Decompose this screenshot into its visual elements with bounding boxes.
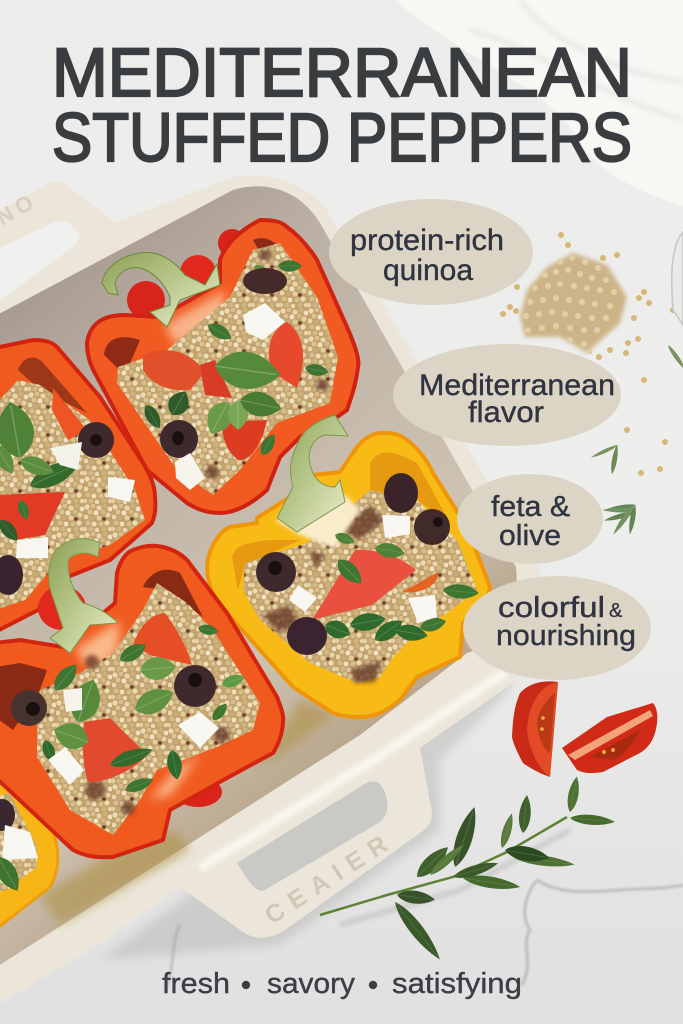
label: colorful and nourishing: colorful xyxy=(498,592,605,624)
dish cavity xyxy=(0,186,517,968)
basil leaves xyxy=(212,348,283,394)
label: protein-rich quinoa xyxy=(329,199,533,305)
red pepper left xyxy=(0,340,155,632)
top handle opening xyxy=(0,221,80,304)
tomato wedge xyxy=(312,550,416,620)
stem xyxy=(49,539,118,653)
quinoa filling xyxy=(37,583,260,835)
feta cubes xyxy=(178,712,219,748)
tomato wedge left xyxy=(512,681,558,777)
rim highlight xyxy=(200,672,505,868)
quinoa filling xyxy=(0,380,145,610)
bottom handle opening xyxy=(237,781,387,891)
basil and herbs xyxy=(65,675,107,727)
flesh highlight xyxy=(165,290,225,345)
tagline: savory xyxy=(267,968,356,1000)
olives xyxy=(256,552,296,592)
small herb twigs xyxy=(590,344,683,536)
inner pockets xyxy=(104,238,315,375)
label: colorful and nourishing: & xyxy=(609,600,623,622)
olives xyxy=(78,422,114,458)
title: MEDITERRANEAN xyxy=(52,34,632,111)
fresh herbs xyxy=(0,516,22,545)
herbs xyxy=(332,554,367,589)
quinoa pile xyxy=(500,232,683,536)
feta cubes xyxy=(243,303,285,340)
cranberry bits xyxy=(262,505,385,683)
feta cubes xyxy=(382,515,410,538)
label: colorful and nourishing xyxy=(463,576,651,680)
quinoa grains xyxy=(523,255,617,354)
tagline: fresh xyxy=(162,968,230,1000)
pepper body xyxy=(0,546,283,857)
label: feta and olive: olive xyxy=(499,520,561,552)
pale flesh at stem base xyxy=(275,495,360,548)
stem xyxy=(277,415,348,532)
scattered grains xyxy=(500,232,676,476)
pepper body xyxy=(87,220,358,513)
tomato pieces xyxy=(143,350,205,390)
baking dish xyxy=(0,175,543,1006)
dish handle top left xyxy=(0,182,118,312)
red pepper top center xyxy=(87,220,358,513)
yellow pepper center xyxy=(207,415,490,717)
flesh highlight xyxy=(75,620,200,800)
olives xyxy=(174,665,216,707)
sprig shadow xyxy=(340,830,570,925)
dish rim xyxy=(0,175,543,1006)
dish shadow xyxy=(100,240,535,960)
tomato pieces xyxy=(52,388,87,440)
label: feta and olive xyxy=(457,474,603,564)
inner pockets xyxy=(0,570,203,730)
fresh herbs xyxy=(163,387,194,420)
herb sprig xyxy=(320,776,615,963)
back lobes xyxy=(127,281,165,319)
dark cranberry bits xyxy=(205,249,328,479)
tomato pieces xyxy=(133,613,192,665)
label: feta and olive: feta & xyxy=(491,491,570,523)
title xyxy=(52,34,632,176)
back lobes xyxy=(38,586,86,630)
herb xyxy=(0,852,26,895)
cherry tomato wedges xyxy=(512,681,657,777)
feta xyxy=(2,825,38,860)
white linen towel xyxy=(395,0,683,206)
olives xyxy=(243,268,287,294)
label: Mediterranean flavor: Mediterranean xyxy=(419,369,615,402)
feta cubes xyxy=(108,477,135,502)
label: protein-rich quinoa: quinoa xyxy=(383,254,473,287)
leaves xyxy=(570,813,615,827)
tagline: satisfying xyxy=(392,968,522,1000)
basil leaves xyxy=(0,399,38,461)
tagline xyxy=(162,968,522,1000)
pepper body xyxy=(207,433,490,717)
stem xyxy=(102,253,220,327)
stem xyxy=(320,817,567,915)
inner pocket xyxy=(18,358,87,413)
label: Mediterranean flavor xyxy=(393,344,621,446)
label: protein-rich quinoa: protein-rich xyxy=(350,224,504,257)
quinoa filling xyxy=(243,490,477,683)
handle lettering bottom: CEAIER xyxy=(260,830,393,930)
cranberry bits xyxy=(85,655,230,815)
label: colorful and nourishing: nourishing xyxy=(496,620,636,652)
olive xyxy=(0,799,15,831)
inner pockets xyxy=(232,452,450,590)
red pepper bottom xyxy=(0,539,283,857)
label: Mediterranean flavor: flavor xyxy=(468,396,544,429)
quinoa filling xyxy=(117,243,338,495)
olive oil on dish floor xyxy=(40,700,335,925)
tomato wedge right xyxy=(562,703,657,773)
glass at right edge xyxy=(672,232,683,325)
yellow pepper bottom left xyxy=(0,743,58,930)
